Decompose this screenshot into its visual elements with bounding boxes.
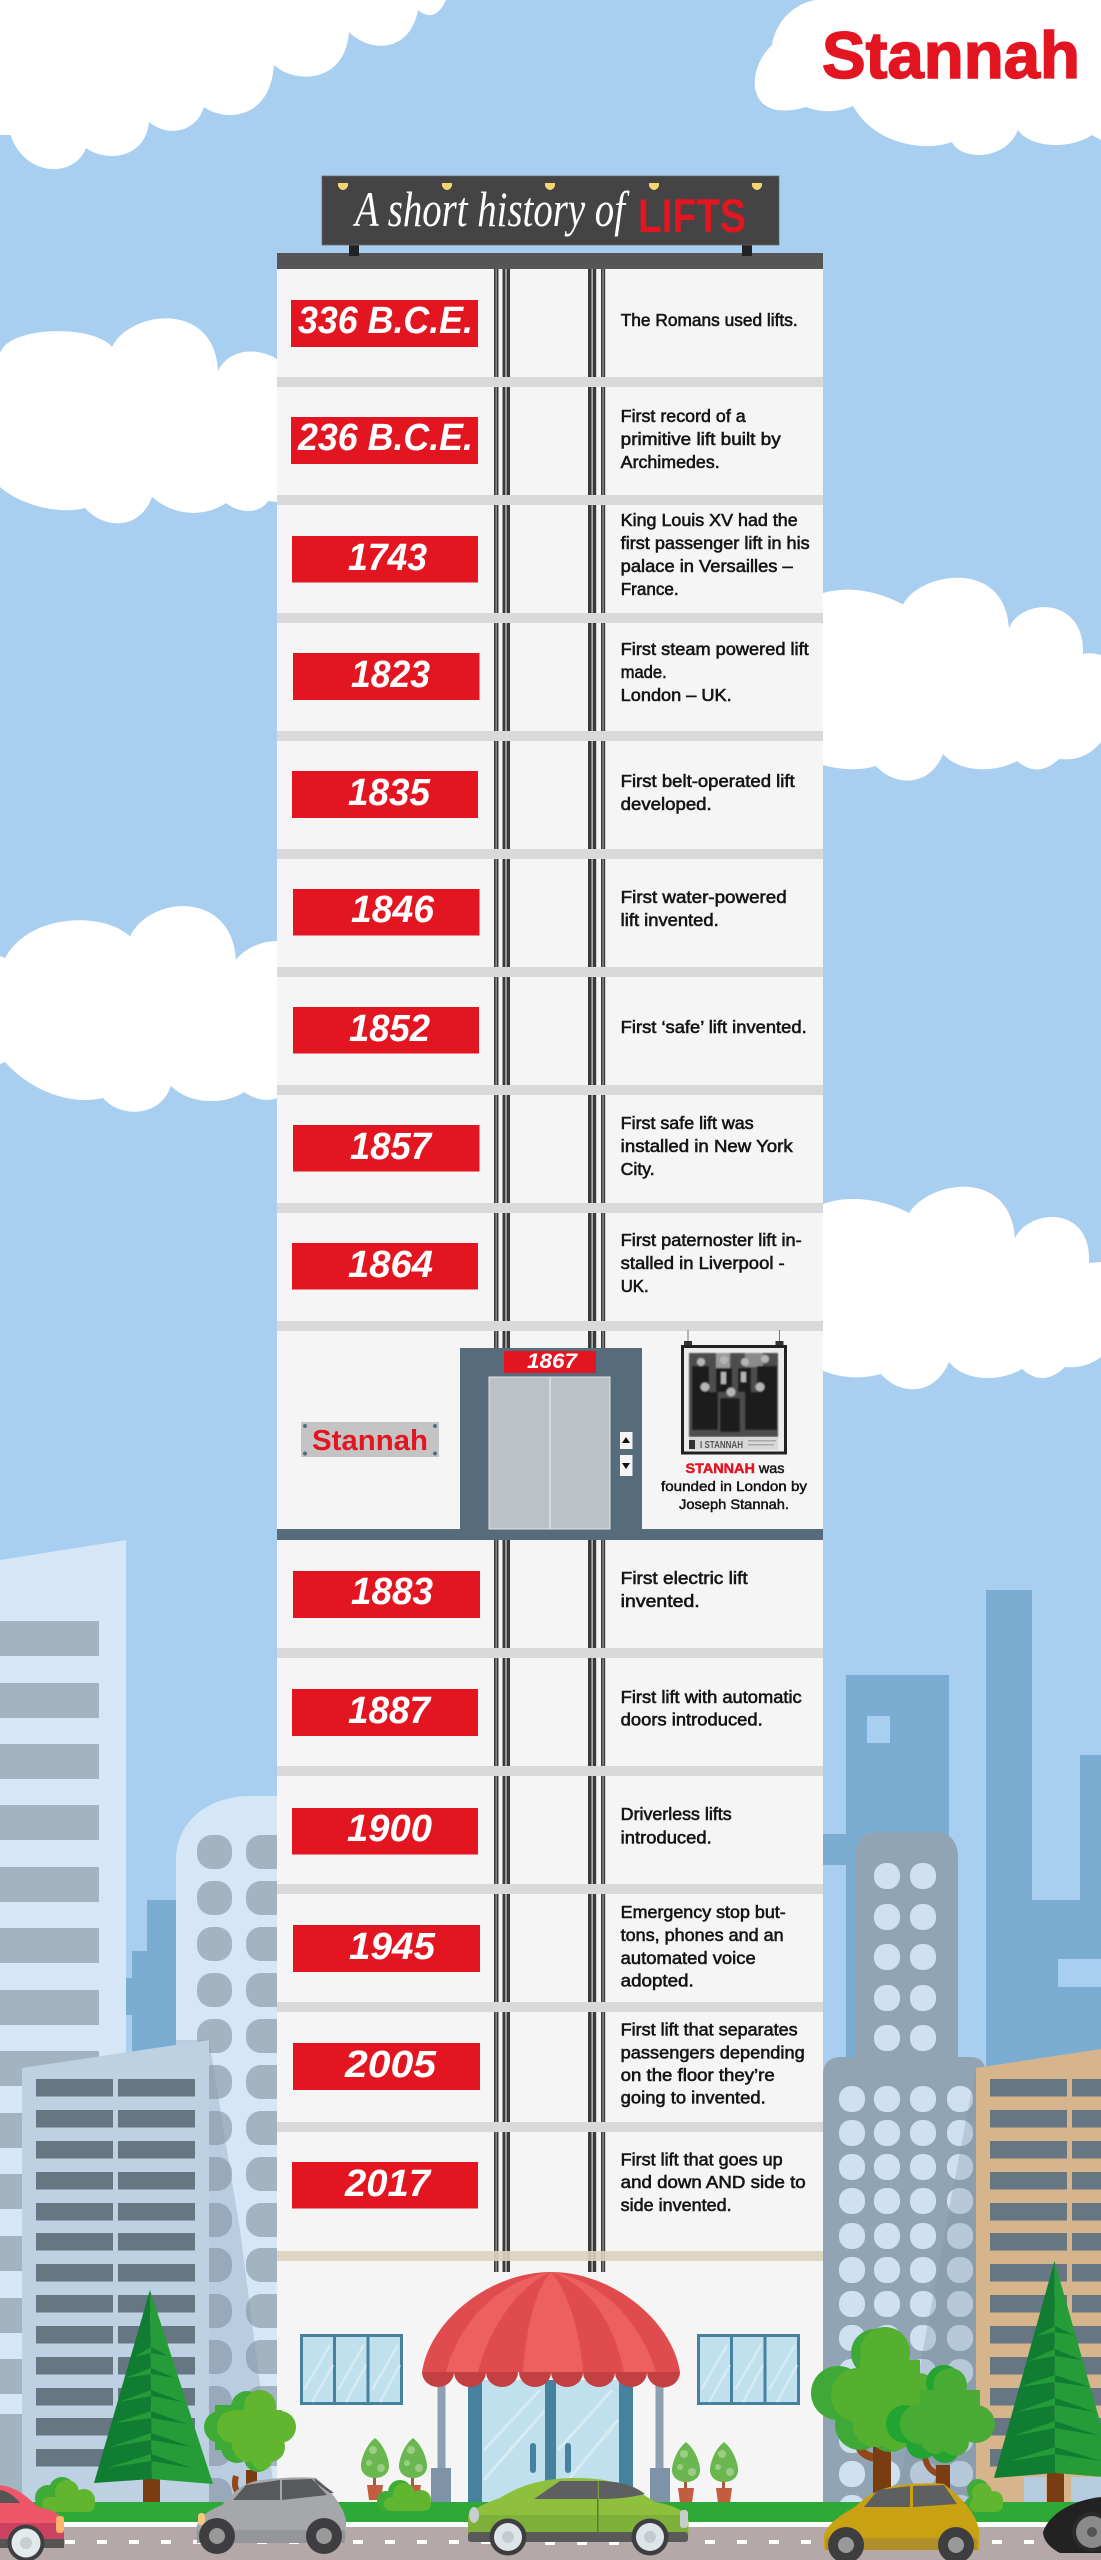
car: green bbox=[468, 2478, 688, 2556]
roof bbox=[277, 253, 823, 269]
text: 1857: installed in New York bbox=[621, 1136, 793, 1156]
tree left bbox=[204, 2390, 296, 2500]
front building left bbox=[22, 2040, 209, 2510]
tan building right bbox=[976, 2049, 1101, 2510]
text: 1883: invented. bbox=[621, 1591, 700, 1611]
pine tree right bbox=[994, 2261, 1101, 2509]
photo caption: founded in London by bbox=[661, 1478, 807, 1494]
text: 1823: made. bbox=[621, 662, 667, 682]
car: grey bbox=[196, 2477, 346, 2554]
2017: 2017 bbox=[344, 2163, 432, 2205]
text: 1835 bbox=[621, 771, 795, 814]
text: 1864: UK. bbox=[621, 1276, 649, 1296]
cloud: left lower bbox=[0, 906, 277, 1112]
car: black bbox=[1043, 2497, 1101, 2553]
lift doors bbox=[489, 1377, 610, 1529]
text: 1945 bbox=[621, 1902, 786, 1990]
rounded building left bbox=[176, 1796, 291, 2512]
text: 1846: lift invented. bbox=[621, 910, 719, 930]
text: 1900: introduced. bbox=[621, 1828, 712, 1848]
bushes bbox=[35, 2477, 1003, 2512]
potted plants right bbox=[672, 2442, 738, 2503]
cloud: right upper bbox=[823, 578, 1101, 781]
text: 236 B.C.E. bbox=[621, 406, 781, 472]
text: 1883: First electric lift bbox=[621, 1568, 748, 1588]
door frames bbox=[468, 2380, 633, 2505]
Stannah plate: Stannah bbox=[312, 1425, 428, 1457]
small tree right bbox=[886, 2365, 995, 2505]
1835: 1835 bbox=[348, 772, 431, 814]
text: 1945: tons, phones and an bbox=[621, 1925, 784, 1945]
1900: 1900 bbox=[347, 1808, 432, 1850]
title text: A short history of bbox=[353, 181, 630, 237]
text: 336 B.C.E.: The Romans used lifts. bbox=[621, 310, 798, 330]
text: 1887: First lift with automatic bbox=[621, 1687, 802, 1707]
text: 1743 bbox=[621, 510, 810, 599]
lift year plate: 1867 bbox=[527, 1350, 578, 1373]
1823: 1823 bbox=[351, 654, 430, 696]
text: 1846 bbox=[621, 887, 787, 930]
text: 1864: First paternoster lift in- bbox=[621, 1230, 802, 1250]
text: 1864: stalled in Liverpool - bbox=[621, 1253, 785, 1273]
pine tree left bbox=[94, 2290, 213, 2511]
text: 1900 bbox=[621, 1804, 732, 1848]
window left bbox=[302, 2335, 402, 2404]
skyline window bbox=[867, 1716, 890, 1743]
distant skyline right bbox=[823, 1590, 1101, 2100]
cloud: top left bbox=[0, 0, 446, 169]
text: 1743: France. bbox=[621, 579, 679, 599]
title highlight: LIFTS bbox=[638, 189, 746, 242]
potted plants left bbox=[361, 2438, 427, 2500]
1846 bbox=[293, 889, 480, 936]
cloud: right lower bbox=[823, 1187, 1101, 1389]
1945: 1945 bbox=[349, 1926, 436, 1968]
1864 bbox=[292, 1243, 478, 1290]
text: 2005: First lift that separates bbox=[621, 2020, 798, 2040]
entrance bbox=[422, 2272, 680, 2505]
text: 1823: First steam powered lift bbox=[621, 639, 809, 659]
text: 1857 bbox=[621, 1113, 793, 1179]
1883: 1883 bbox=[351, 1571, 433, 1613]
1857 bbox=[293, 1125, 480, 1172]
lift cables bbox=[494, 269, 605, 2272]
1857: 1857 bbox=[350, 1126, 433, 1168]
ground floor band bbox=[277, 2251, 823, 2261]
1743 bbox=[292, 536, 478, 582]
1864: 1864 bbox=[348, 1244, 433, 1286]
2017 bbox=[292, 2162, 478, 2208]
road and verge bbox=[0, 2502, 1101, 2560]
text: 1743: palace in Versailles – bbox=[621, 556, 793, 576]
window right bbox=[698, 2335, 798, 2404]
1846: 1846 bbox=[351, 889, 435, 931]
text: 1852: First ‘safe’ lift invented. bbox=[621, 1017, 807, 1037]
car: yellow bbox=[824, 2483, 979, 2560]
text: 1945: adopted. bbox=[621, 1970, 694, 1990]
text: 1743: King Louis XV had the bbox=[621, 510, 798, 530]
text: 1864 bbox=[621, 1230, 802, 1296]
2005: 2005 bbox=[344, 2044, 437, 2086]
sign lights bbox=[338, 183, 762, 190]
floor slab bbox=[277, 1529, 823, 1540]
text: 1857: City. bbox=[621, 1159, 655, 1179]
distant skyline left bbox=[126, 1900, 176, 2101]
text: 1846: First water-powered bbox=[621, 887, 787, 907]
text: 2017: side invented. bbox=[621, 2195, 732, 2215]
1887: 1887 bbox=[348, 1690, 432, 1732]
1867 Stannah floor bbox=[277, 1330, 823, 1540]
1852 bbox=[293, 1007, 479, 1054]
main building bbox=[277, 250, 823, 2509]
1883 bbox=[293, 1571, 480, 1618]
1887 bbox=[292, 1689, 478, 1736]
cloud: left upper bbox=[0, 318, 277, 523]
framed photo: I STANNAH bbox=[700, 1439, 743, 1451]
text: 236 B.C.E.: First record of a bbox=[621, 406, 746, 426]
text: 1835: First belt-operated lift bbox=[621, 771, 795, 791]
logo: Stannah: Stannah bbox=[822, 18, 1080, 92]
2005 bbox=[293, 2043, 480, 2090]
text: 236 B.C.E.: Archimedes. bbox=[621, 452, 720, 472]
text: 1857: First safe lift was bbox=[621, 1113, 754, 1133]
glass doors bbox=[482, 2380, 619, 2505]
text: 1887 bbox=[621, 1687, 802, 1730]
1823 bbox=[293, 653, 480, 700]
lift year plate bbox=[504, 1350, 596, 1373]
floor dividers bbox=[277, 377, 823, 2132]
light background building left bbox=[0, 1540, 126, 2510]
lift frame bbox=[460, 1348, 642, 1530]
336 B.C.E.: 336 B.C.E. bbox=[298, 300, 473, 342]
text: 1945: Emergency stop but- bbox=[621, 1902, 786, 1922]
car: red bbox=[0, 2485, 64, 2560]
text: 2017 bbox=[621, 2150, 806, 2215]
photo caption: STANNAH was bbox=[686, 1460, 784, 1476]
framed photo bbox=[682, 1330, 786, 1453]
1852: 1852 bbox=[349, 1008, 430, 1050]
text: 1743: first passenger lift in his bbox=[621, 533, 810, 553]
text: 1835: developed. bbox=[621, 794, 712, 814]
photo caption bbox=[661, 1460, 807, 1512]
236 B.C.E.: 236 B.C.E. bbox=[297, 417, 473, 459]
lift down button bbox=[620, 1455, 632, 1476]
text: 236 B.C.E.: primitive lift built by bbox=[621, 429, 781, 449]
text: 2017: and down AND side to bbox=[621, 2172, 806, 2192]
1900 bbox=[292, 1808, 478, 1854]
text: 1945: automated voice bbox=[621, 1948, 756, 1968]
cloud: top right bbox=[755, 0, 1101, 155]
lift up button bbox=[620, 1432, 632, 1449]
text: 1823: London – UK. bbox=[621, 685, 732, 705]
large tree right bbox=[811, 2327, 940, 2505]
text: 2005: passengers depending bbox=[621, 2042, 805, 2062]
text: 2017: First lift that goes up bbox=[621, 2150, 783, 2170]
text: 1883 bbox=[621, 1568, 748, 1611]
photo caption: Joseph Stannah. bbox=[679, 1496, 789, 1512]
roof posts bbox=[349, 250, 752, 256]
text: 2005: on the floor they’re bbox=[621, 2065, 775, 2085]
awning bbox=[422, 2272, 680, 2387]
1743: 1743 bbox=[348, 537, 427, 579]
grey tower right bbox=[823, 1832, 986, 2521]
1945 bbox=[293, 1925, 480, 1972]
title sign bbox=[322, 176, 779, 257]
text: 2005 bbox=[621, 2020, 805, 2108]
text: 1823 bbox=[621, 639, 809, 705]
entrance columns bbox=[431, 2385, 670, 2504]
text: 1900: Driverless lifts bbox=[621, 1804, 732, 1824]
1835 bbox=[292, 771, 478, 818]
text: 2005: going to invented. bbox=[621, 2088, 766, 2108]
text: 1887: doors introduced. bbox=[621, 1710, 763, 1730]
